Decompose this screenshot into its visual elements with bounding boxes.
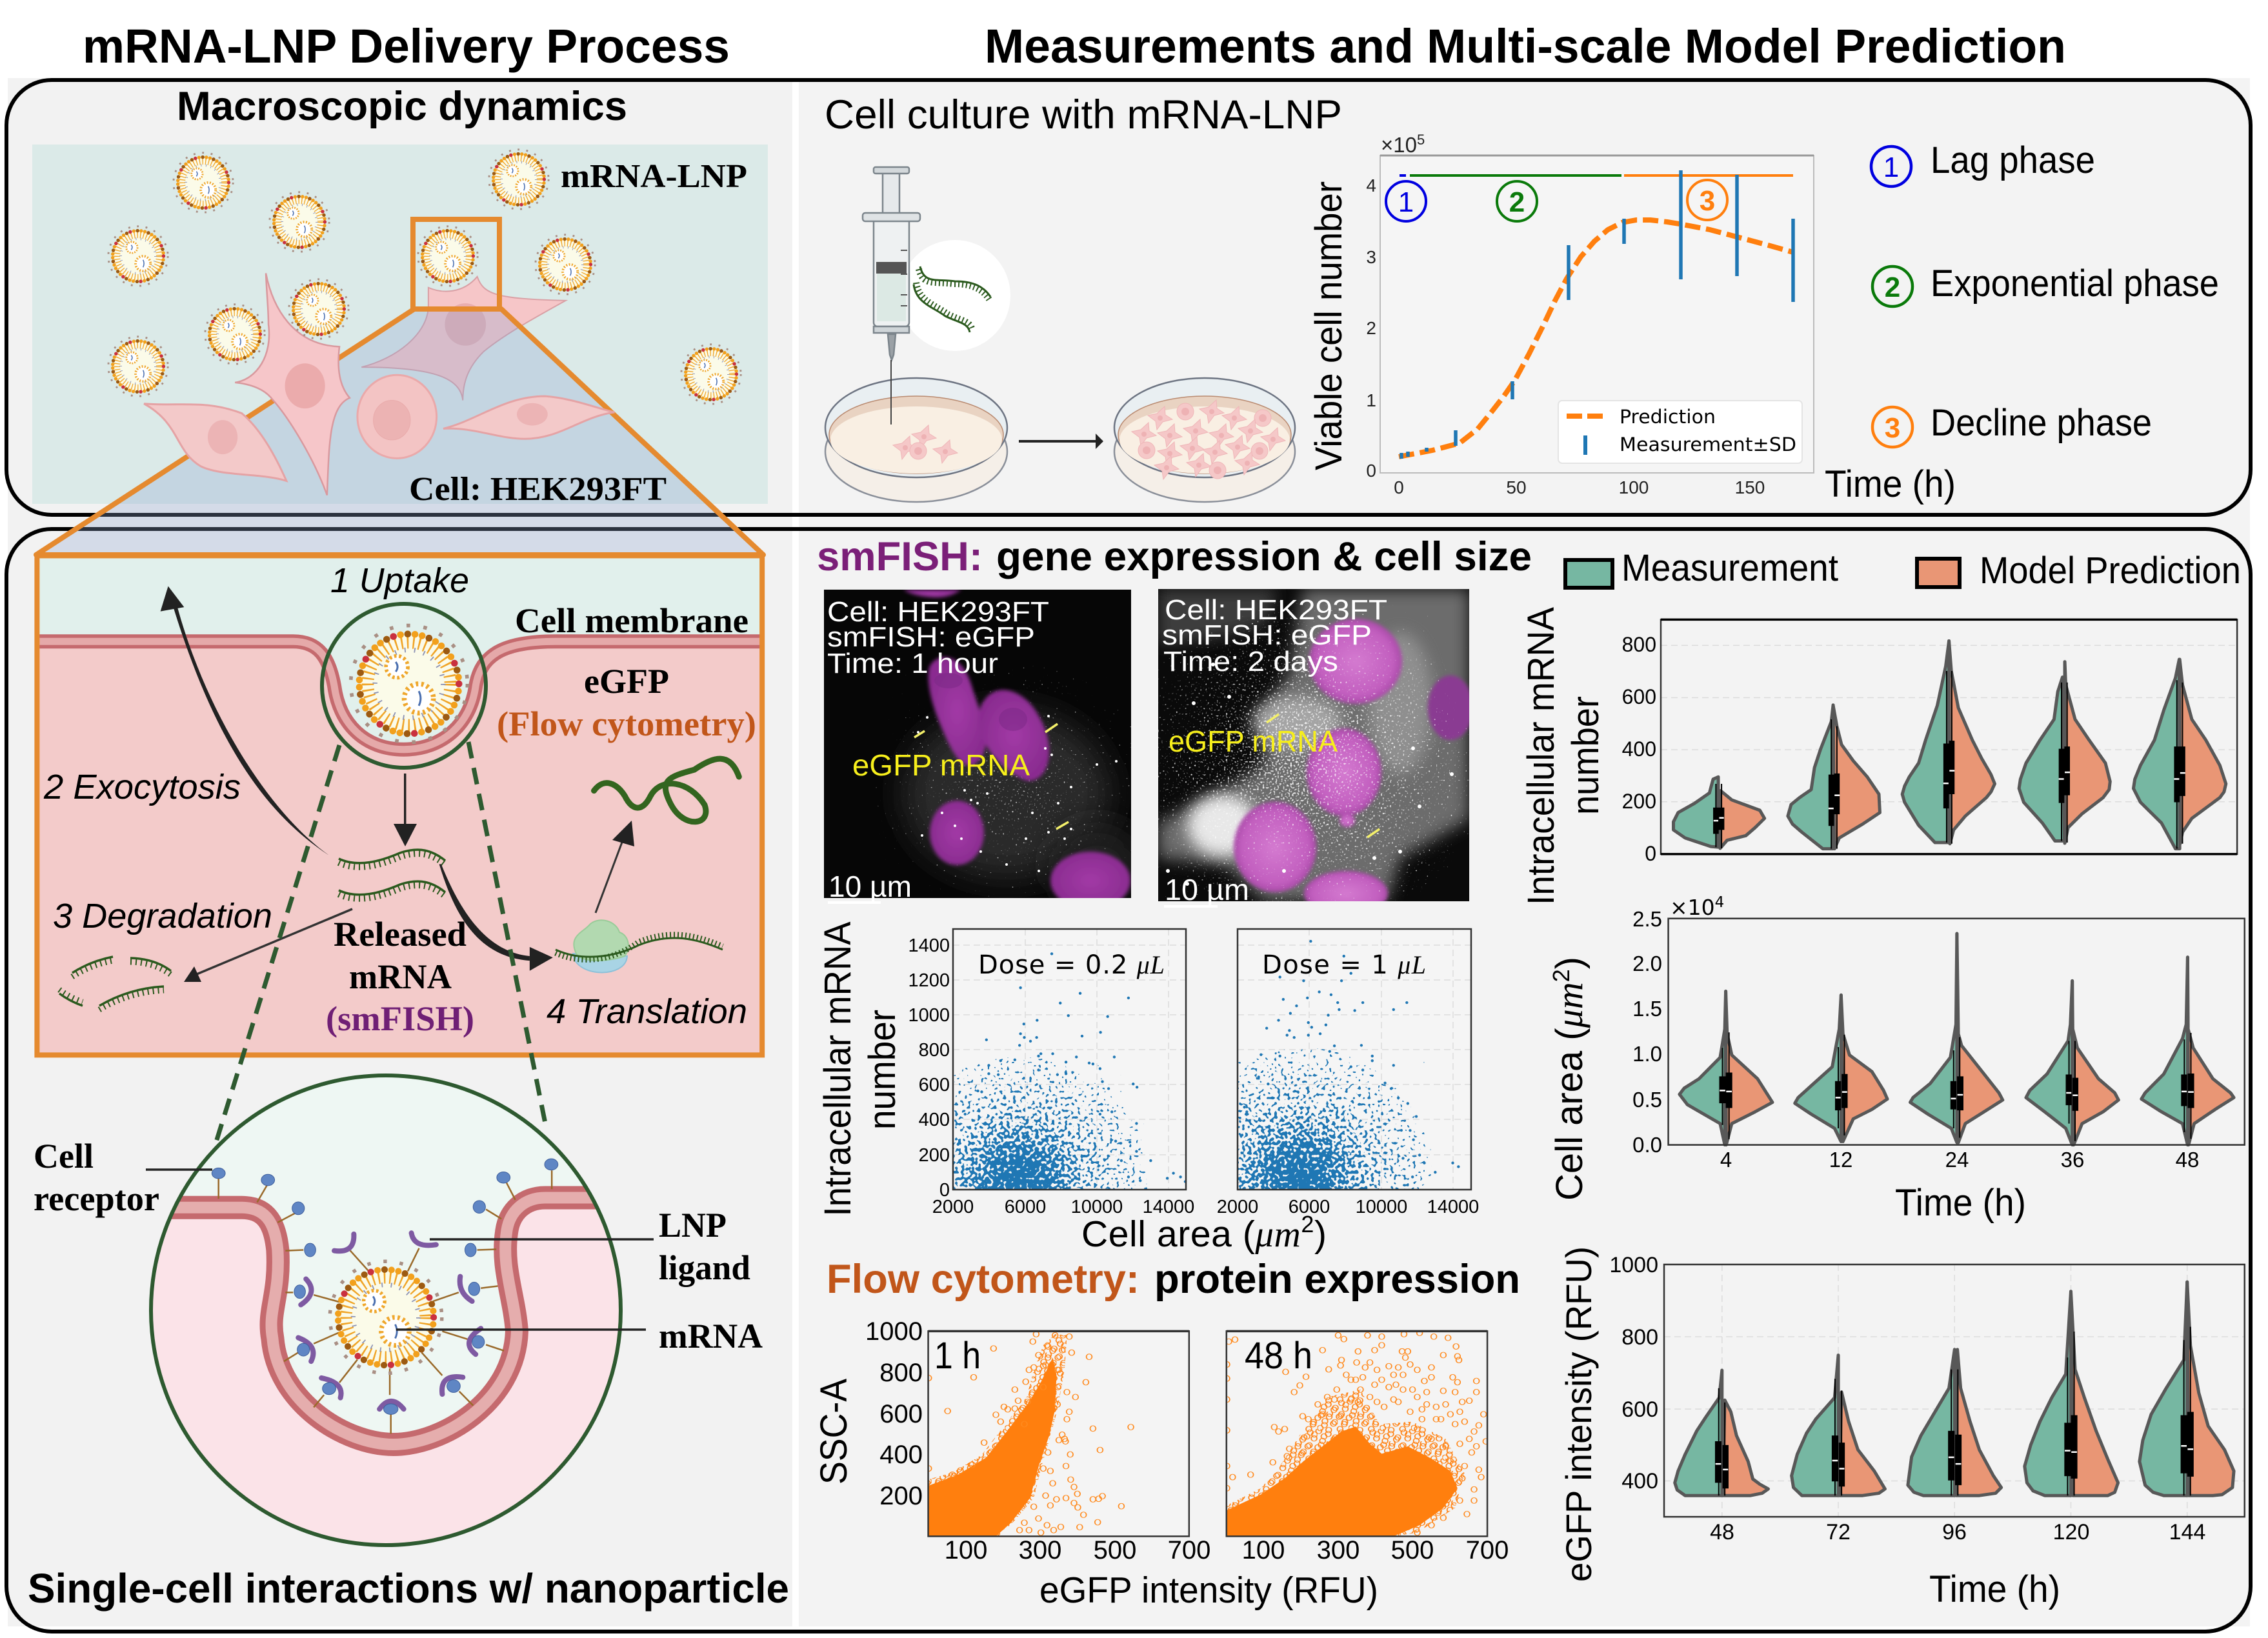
flow y label: SSC-A <box>813 1379 855 1484</box>
x ticks: 300 <box>1019 1536 1061 1564</box>
tick labels: 150 <box>1735 477 1765 497</box>
multiplier: 4 <box>1715 894 1724 911</box>
y ticks <box>908 935 950 1201</box>
tick labels: 3 <box>1366 247 1376 267</box>
x ticks: 14000 <box>1143 1197 1194 1217</box>
scatter y label: Intracellular mRNA <box>817 921 859 1217</box>
label: LNP ligand: ligand <box>659 1248 750 1287</box>
y ticks: 600 <box>1622 685 1656 708</box>
flow x label: eGFP intensity (RFU) <box>1039 1570 1378 1611</box>
chart: scatter dose 1 <box>1218 928 1479 1213</box>
legend: growth phases: Decline phase <box>1931 402 2152 444</box>
yellow arrows and labels on image 1: eGFP mRNA <box>852 748 1030 782</box>
y ticks: 0 <box>1645 842 1656 865</box>
violin 4 h <box>1680 992 1772 1145</box>
y axis label: Viable cell number <box>1308 181 1350 470</box>
tick labels: 100 <box>1619 477 1649 497</box>
x ticks: 6000 <box>1005 1197 1046 1217</box>
y label: Intracellular mRNA <box>1520 607 1562 905</box>
tick labels: ×10 <box>1381 133 1417 157</box>
icon: LNP at membrane <box>351 626 467 742</box>
yellow arrows and labels on image 2: Time: 2 days <box>1163 646 1338 677</box>
violin 48 h <box>2133 659 2226 849</box>
yellow arrows and labels on image 1: Cell: HEK293FT <box>827 596 1049 628</box>
x ticks: 14000 <box>1427 1197 1479 1217</box>
microscopy image: 1 hour <box>824 590 1131 898</box>
yellow arrows and labels on image 2: 10 µm <box>1165 873 1249 906</box>
y ticks <box>1622 633 1656 865</box>
x ticks: 48 <box>1710 1520 1734 1544</box>
x ticks: 300 <box>1317 1536 1360 1564</box>
cell under zoom region <box>361 277 566 400</box>
tick labels: 50 <box>1506 477 1527 497</box>
icon: ribosome translating mRNA <box>556 920 723 972</box>
chart: viable cell number vs time: 3 <box>1700 185 1715 217</box>
chart: scatter dose 0.2 <box>910 928 1194 1213</box>
x ticks: 500 <box>1391 1536 1434 1564</box>
arrow: exocytosis <box>161 586 329 855</box>
y label: number <box>1565 696 1607 815</box>
x axis label: Time (h) <box>1825 463 1956 505</box>
heading: Single-cell interactions: Single-cell interactions w/ nanoparticle <box>28 1565 789 1612</box>
heading: Flow cytometry protein expression: Flow cytometry: <box>827 1257 1139 1302</box>
label: LNP ligand <box>430 1206 750 1287</box>
panel outline: macroscopic and cell culture <box>6 80 2251 515</box>
arrow: to translation <box>439 864 553 971</box>
x ticks: 2000 <box>932 1197 974 1217</box>
panel outline: single-cell and measurements <box>6 529 2251 1632</box>
panel: cell culture <box>825 92 2219 505</box>
y ticks <box>1632 907 1662 1157</box>
phase markers <box>1386 180 1727 221</box>
y ticks: 400 <box>1621 1469 1658 1493</box>
y ticks: 1.0 <box>1632 1042 1662 1066</box>
y ticks <box>1609 1253 1658 1493</box>
x ticks: 4 <box>1720 1148 1732 1172</box>
icon: released mRNA strands <box>339 850 445 899</box>
yellow arrows and labels on image 1: 10 µm <box>828 870 912 903</box>
violin 4 h <box>1674 777 1765 848</box>
violin 48 h <box>2142 957 2234 1145</box>
violin 12 h <box>1788 705 1880 849</box>
uptake circle <box>322 604 486 768</box>
zoom trapezoid <box>36 309 763 555</box>
chart legend: Measurement±SD <box>1620 434 1796 455</box>
x ticks: 12 <box>1829 1148 1852 1172</box>
legend: growth phases <box>1871 139 2219 447</box>
y ticks: 800 <box>879 1359 923 1387</box>
heading: Macroscopic dynamics: Macroscopic dynamics <box>177 84 627 129</box>
yellow arrows and labels on image 2: smFISH: eGFP <box>1162 619 1372 651</box>
x ticks: 100 <box>945 1536 987 1564</box>
violin 24 h <box>1910 934 2003 1143</box>
x ticks: 100 <box>1242 1536 1285 1564</box>
x ticks <box>1710 1520 2205 1544</box>
x ticks: 10000 <box>1356 1197 1407 1217</box>
chart legend <box>1558 401 1802 463</box>
tick labels: 2 <box>1366 318 1376 338</box>
y ticks: 600 <box>1621 1397 1658 1422</box>
yellow arrows and labels on image 2 <box>1162 594 1387 906</box>
mRNA-LNP particles <box>108 150 741 404</box>
violin 72 h <box>1792 1355 1885 1495</box>
label: LNP ligand: LNP <box>659 1206 727 1244</box>
scatter x label: ) <box>1314 1214 1327 1255</box>
heading: smFISH gene expression and cell size: gene expression & cell size <box>996 534 1532 579</box>
y ticks: 200 <box>879 1482 923 1510</box>
legend: measurement vs model prediction <box>1565 547 2241 592</box>
y ticks: 1000 <box>1609 1253 1658 1277</box>
cells: HEK293FT group <box>144 274 614 495</box>
icon: dish with many cells <box>1114 378 1295 502</box>
zoom box on a particle <box>413 219 499 309</box>
violin 48 h <box>1675 1370 1768 1495</box>
icon: LNP inside pit <box>330 1261 442 1373</box>
legend: growth phases: 1 <box>1883 152 1899 183</box>
x ticks <box>945 1536 1210 1564</box>
dashed connector lines <box>216 742 547 1142</box>
label: mRNA pointer: mRNA <box>659 1317 763 1355</box>
tick labels: 5 <box>1417 132 1425 148</box>
scatter annotation: Dose = 1 μL <box>1262 950 1426 980</box>
label: Flow cytometry: (Flow cytometry) <box>497 704 756 743</box>
label: mRNA-LNP: mRNA-LNP <box>561 158 747 195</box>
violin 36 h <box>2019 662 2110 843</box>
y ticks: 400 <box>1622 737 1656 761</box>
x ticks <box>1720 1148 2199 1172</box>
y ticks: 1000 <box>908 1005 950 1026</box>
tick labels: 0 <box>1366 461 1376 481</box>
legend: growth phases: 2 <box>1885 272 1900 303</box>
y label: 2 <box>1548 969 1574 982</box>
x ticks: 500 <box>1094 1536 1136 1564</box>
violin 24 h <box>1902 641 1994 844</box>
yellow arrows and labels on image 2: eGFP mRNA <box>1169 724 1338 758</box>
violin 12 h <box>1795 995 1887 1141</box>
yellow arrows and labels on image 1: smFISH: eGFP <box>827 621 1035 653</box>
y ticks: 800 <box>1622 633 1656 656</box>
label: 1 Uptake: 1 Uptake <box>330 561 469 600</box>
x ticks: 10000 <box>1071 1197 1123 1217</box>
tick labels: 1 <box>1366 390 1376 410</box>
chart legend: Prediction <box>1620 406 1716 428</box>
y label <box>1520 607 1607 905</box>
yellow arrows and labels on image 2: Cell: HEK293FT <box>1165 594 1387 626</box>
x ticks: 96 <box>1942 1520 1967 1544</box>
icon: receptors and ligands <box>212 1159 558 1434</box>
syringe needle into dish <box>890 360 892 424</box>
error bars: measurement <box>1401 170 1793 459</box>
heading: Cell culture with mRNA-LNP: Cell culture with mRNA-LNP <box>825 92 1342 137</box>
y ticks: 1200 <box>908 970 950 991</box>
arrow: culture growth <box>1019 434 1103 449</box>
y ticks: 0 <box>939 1180 950 1201</box>
x ticks: 120 <box>2053 1520 2089 1544</box>
chart: eGFP intensity violins <box>1558 1246 2245 1610</box>
label: Released mRNA smFISH: Released <box>334 915 467 954</box>
icon: mRNA fragments <box>59 957 171 1010</box>
x ticks: 24 <box>1945 1148 1969 1172</box>
x ticks: 700 <box>1466 1536 1509 1564</box>
label: Released mRNA smFISH <box>326 915 474 1038</box>
violin 120 h <box>2025 1292 2118 1495</box>
legend: growth phases: Exponential phase <box>1931 263 2219 305</box>
x label: Time (h) <box>1895 1182 2026 1224</box>
label: Released mRNA smFISH: (smFISH) <box>326 999 474 1038</box>
tick labels: 0 <box>1394 477 1404 497</box>
heading: Flow cytometry protein expression: protein expression <box>1154 1257 1520 1302</box>
tick labels <box>1366 132 1765 497</box>
multiplier: ×10 <box>1670 895 1715 920</box>
legend: measurement vs model prediction: Model Prediction <box>1980 550 2241 592</box>
x ticks: 144 <box>2169 1520 2205 1544</box>
x ticks: 36 <box>2061 1148 2084 1172</box>
chart: intracellular mRNA violins <box>1520 607 2237 905</box>
panel: cell uptake zoom <box>37 555 762 1055</box>
prediction curve <box>1399 220 1793 457</box>
arrow: down to released mRNA <box>394 774 417 846</box>
label: eGFP: eGFP <box>584 662 669 701</box>
title: Measurements and Multi-scale Model Prediction: Measurements and Multi-scale Model Prediction <box>985 19 2066 73</box>
arrow: up to protein <box>596 821 634 913</box>
yellow arrows and labels on image 1: Time: 1 hour <box>827 648 998 679</box>
y ticks <box>865 1317 923 1510</box>
panel annotation: 48 h <box>1245 1335 1312 1377</box>
y ticks: 400 <box>879 1441 923 1469</box>
chart: cell area violins <box>1548 894 2245 1224</box>
y label: ) <box>1549 957 1591 969</box>
x ticks: 72 <box>1826 1520 1851 1544</box>
macroscopic scene background <box>32 145 768 504</box>
legend: growth phases: 3 <box>1885 412 1900 444</box>
y ticks: 800 <box>1621 1325 1658 1350</box>
microscopy image: 2 days <box>1158 589 1469 901</box>
label: 2 Exocytosis: 2 Exocytosis <box>43 768 241 806</box>
y ticks: 1400 <box>908 935 950 956</box>
y ticks: 200 <box>919 1145 950 1166</box>
chart: viable cell number vs time: 1 <box>1398 186 1414 218</box>
title: mRNA-LNP Delivery Process: mRNA-LNP Delivery Process <box>83 19 730 73</box>
y ticks: 200 <box>1622 790 1656 813</box>
scatter y label: number <box>861 1010 903 1130</box>
panel annotation: 1 h <box>934 1335 981 1377</box>
y ticks: 2.5 <box>1632 907 1662 931</box>
y label: eGFP intensity (RFU) <box>1558 1246 1599 1582</box>
chart: viable cell number vs time: 2 <box>1509 186 1525 218</box>
chart: flow cytometry 1 h <box>865 1317 1210 1564</box>
icon: eGFP protein <box>594 759 739 822</box>
heading: Flow cytometry protein expression <box>827 1257 1520 1302</box>
y ticks: 600 <box>919 1075 950 1095</box>
arrow: degradation <box>184 909 352 982</box>
y ticks: 800 <box>919 1040 950 1061</box>
scatter y label <box>817 921 903 1217</box>
y ticks: 400 <box>919 1110 950 1130</box>
label: Cell receptor: Cell <box>34 1137 94 1175</box>
label: Cell membrane: Cell membrane <box>515 601 748 640</box>
violin 96 h <box>1908 1350 2002 1495</box>
scatter x label: 2 <box>1301 1211 1314 1237</box>
violin 144 h <box>2140 1282 2234 1495</box>
y ticks: 2.0 <box>1632 952 1662 975</box>
y ticks: 600 <box>879 1400 923 1428</box>
x ticks: 6000 <box>1289 1197 1330 1217</box>
chart: flow cytometry 48 h <box>1227 1331 1509 1564</box>
icon: dish with few cells <box>825 378 1007 502</box>
violin 36 h <box>2026 981 2118 1145</box>
x ticks <box>1217 1197 1479 1217</box>
label: Cell HEK293FT: Cell: HEK293FT <box>409 471 667 508</box>
y ticks: 0.0 <box>1632 1133 1662 1157</box>
label: Released mRNA smFISH: mRNA <box>349 957 452 996</box>
icon: white circle with mRNA <box>899 240 1010 351</box>
x ticks: 700 <box>1168 1536 1210 1564</box>
x ticks <box>1242 1536 1509 1564</box>
icon: syringe <box>863 167 920 360</box>
chart: viable cell number vs time <box>1308 132 1956 505</box>
x ticks <box>932 1197 1194 1217</box>
y ticks: 0.5 <box>1632 1088 1662 1112</box>
tick labels: 4 <box>1366 175 1376 195</box>
x ticks: 48 <box>2176 1148 2199 1172</box>
legend: growth phases: Lag phase <box>1931 139 2095 181</box>
panel: single-cell interaction detail <box>28 1074 789 1612</box>
label: 3 Degradation: 3 Degradation <box>53 897 272 935</box>
yellow arrows and labels on image 1 <box>827 596 1069 903</box>
label: Cell receptor <box>34 1137 212 1218</box>
label: 4 Translation: 4 Translation <box>547 992 747 1031</box>
scatter annotation: Dose = 0.2 μL <box>978 950 1165 980</box>
label: Cell receptor: receptor <box>34 1179 159 1218</box>
y ticks: 1000 <box>865 1317 923 1346</box>
heading: smFISH gene expression and cell size: smFISH: <box>817 534 983 579</box>
scatter x label: Cell area (μm <box>1081 1214 1301 1255</box>
phase bars <box>1400 174 1793 177</box>
x ticks: 2000 <box>1217 1197 1258 1217</box>
legend: measurement vs model prediction: Measurement <box>1621 547 1838 589</box>
x label: Time (h) <box>1929 1568 2060 1610</box>
y ticks: 1.5 <box>1632 997 1662 1021</box>
y label: Cell area (μm <box>1549 982 1591 1201</box>
